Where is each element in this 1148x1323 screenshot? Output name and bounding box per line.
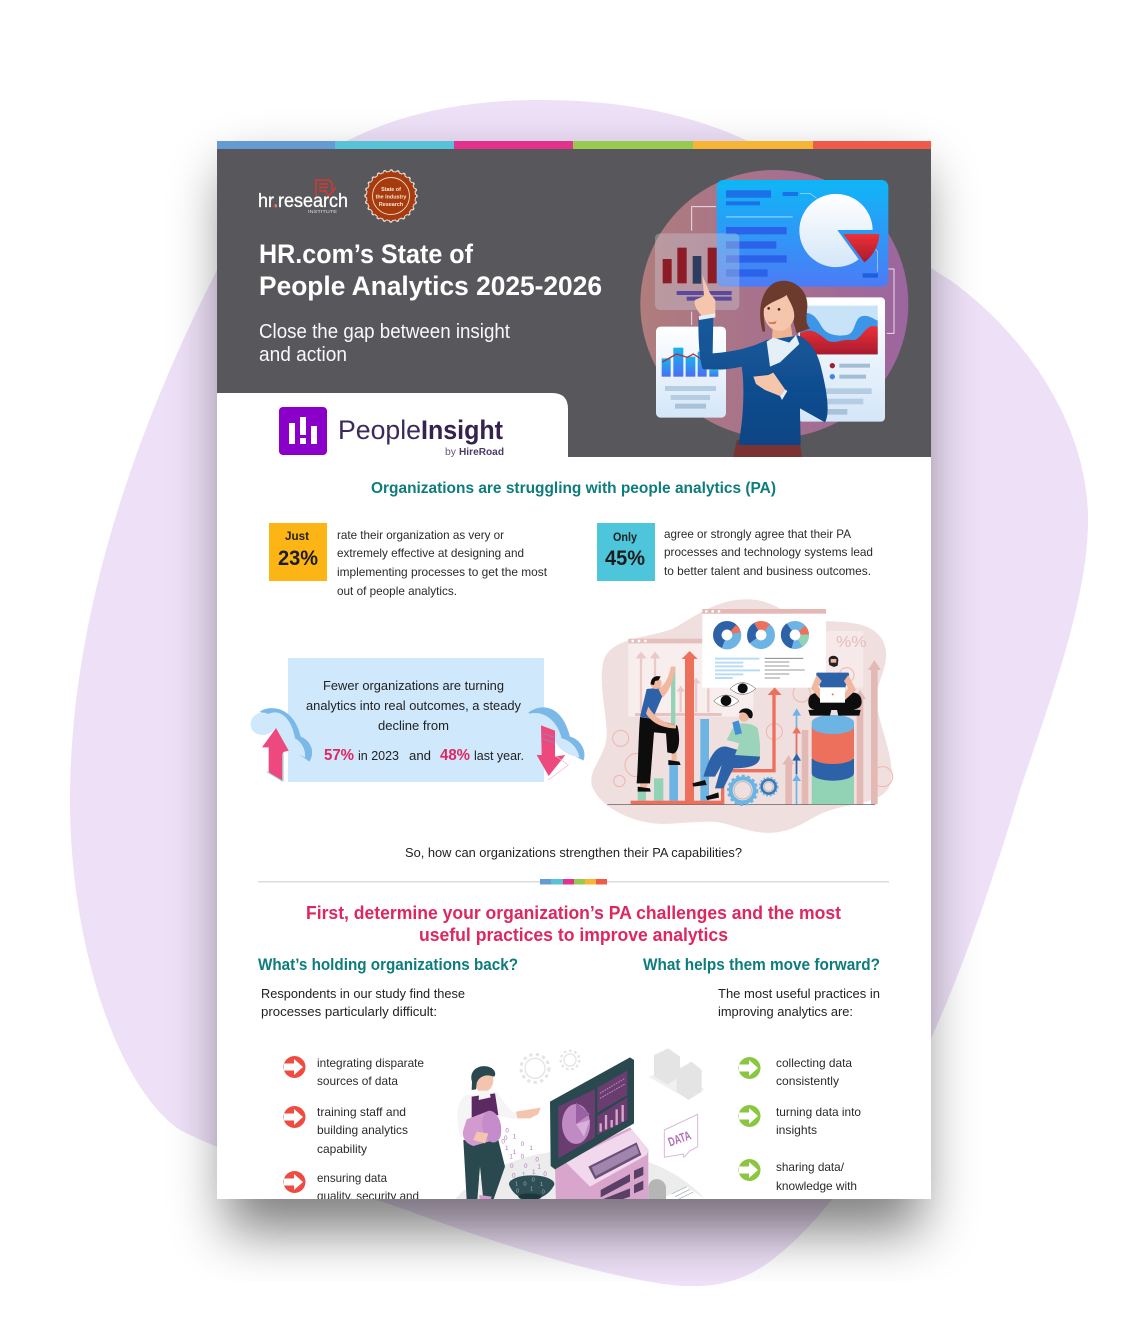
heading: struggling: Organizations are struggling with people analytics (PA) [371,480,776,497]
heading: first determine: First, determine your organization’s PA challenges and the most [306,903,841,923]
intro: useful practices [718,987,880,1019]
badge: State of the Industry Research [366,171,416,221]
icon: cloud with down arrow [528,707,585,780]
challenges list: building analytics [317,1123,408,1137]
challenges list: quality, security and [317,1189,419,1203]
subtitle: Close the gap between insight [259,321,510,343]
challenges list: sources of data [317,1074,398,1088]
intro: useful practices: improving analytics are: [718,1005,853,1019]
falling binary digits: 0 [505,1128,509,1135]
subtitle: and action [259,344,347,366]
intro: useful practices: The most useful practices in [718,987,880,1001]
challenges list: integrating disparate [317,1056,424,1070]
falling binary digits: 1 [532,1169,536,1176]
small rising arrows [792,708,801,804]
pale right panel [826,631,863,688]
practices list: sharing data/ [776,1160,845,1174]
orange arrows [631,651,782,804]
intro: difficult processes [261,987,465,1019]
infographic page [217,141,931,1199]
data speech bubble [664,1114,698,1157]
left chart card [656,327,726,418]
page drop shadow [226,170,922,1231]
intro: difficult processes: processes particularly difficult: [261,1005,437,1019]
subheading: move forward: What helps them move forward? [643,956,880,974]
bowl: 1 [530,1187,533,1193]
closing question: So, how can organizations strengthen their PA capabilities? [405,846,742,860]
icon: green arrow [738,1105,760,1127]
practices list: consistently [776,1074,839,1088]
illustration: data pouring into computer [433,1048,727,1323]
heading: first determine [306,903,841,945]
falling binary digits: 0 [524,1163,528,1170]
back window [628,639,753,717]
callout: declining outcomes: and [409,749,431,763]
header illustration: woman presenting dashboards [640,170,908,457]
falling binary digits: 0 [521,1141,525,1148]
stat: 23% [269,523,327,581]
sponsor tab [217,393,568,457]
falling binary digits: 0 [510,1163,514,1170]
logo: PeopleInsight: HireRoad [459,447,504,458]
data cylinder [812,715,854,804]
subtitle [260,323,510,361]
falling binary digits: 1 [513,1134,517,1141]
callout: declining outcomes: analytics into real outcomes, a steady [306,699,522,713]
decorative rings [613,668,893,787]
stat: 45%: 45% [605,547,645,570]
bowl: 0 [542,1189,545,1195]
falling binary digits: 1 [505,1145,509,1152]
icon: cloud with up arrow [251,708,312,781]
logo: hr.research institute: INSTITUTE [308,209,337,214]
falling binary digits: 0 [521,1154,525,1161]
icon: green arrow [738,1159,760,1181]
logo: hr.research institute [258,180,348,214]
badge: State of the Industry Research: Research [379,202,403,208]
woman figure [695,275,828,457]
stat text: 45% [664,530,872,575]
eyes [714,683,756,707]
icon: red arrow [284,1171,306,1193]
falling binary digits: 0 [535,1157,539,1164]
logo: PeopleInsight [279,407,504,458]
pale arrows [782,660,881,804]
stat text: 23%: extremely effective at designing and [337,546,524,560]
stat text: 23%: out of people analytics. [337,584,457,598]
falling binary digits: 0 [504,1135,508,1142]
callout: declining outcomes: decline from [378,719,449,733]
person [457,1066,541,1200]
bars [638,719,709,801]
title: HR.com’s State of [259,239,474,269]
illustration: team analysing data [591,599,893,833]
falling binary digits [501,1128,547,1179]
stat: 45%: Only [613,530,637,544]
callout: declining outcomes: Fewer organizations are turning [323,679,504,693]
stat: 23%: 23% [278,547,318,570]
falling binary digits: 1 [529,1145,533,1152]
logo: PeopleInsight: Insight [421,415,503,445]
callout: declining outcomes: in 2023 [358,749,399,763]
challenges list: ensuring data [317,1171,387,1185]
subheading: holding back: What’s holding organizations back? [258,956,518,974]
falling binary digits: 1 [509,1154,513,1161]
badge: State of the Industry Research: State of [381,187,401,193]
intro: difficult processes: Respondents in our study find these [261,987,465,1001]
bowl: 0 [516,1189,519,1195]
bowl: 1 [540,1182,543,1188]
computer [550,1057,648,1207]
stat text: 45%: processes and technology systems lead [664,545,873,559]
right chart card [798,297,885,422]
bowl: 1 [515,1181,518,1187]
logo: hr.research institute: hr.research [258,190,348,212]
falling binary digits: 0 [543,1171,547,1178]
icon: red arrow [284,1056,306,1078]
background purple blob [70,100,1088,1286]
practices list: knowledge with [776,1179,857,1193]
ground and base [607,804,875,805]
stat text: 45%: to better talent and business outcomes. [664,564,871,578]
stat: 45% [597,523,655,581]
connectors [692,207,894,333]
percent symbols: %% [836,634,867,651]
man on cylinder with laptop [808,656,862,716]
bowl: 0 [532,1178,535,1184]
falling binary digits: 1 [513,1149,517,1156]
title [259,239,602,301]
practices list: turning data into [776,1105,861,1119]
callout: declining outcomes: last year. [474,749,524,763]
stat text: 23%: rate their organization as very or [337,528,504,542]
falling binary digits: 0 [512,1172,516,1179]
stat text: 23%: implementing processes to get the most [337,565,548,579]
challenges list [284,1056,424,1203]
header colour strip [217,141,931,149]
falling binary digits: 0 [501,1138,505,1145]
grey box and document [648,1179,707,1207]
icon: green arrow [738,1057,760,1079]
bowl: 0 [523,1181,526,1187]
stat: 23%: Just [285,529,309,543]
falling binary digits: 1 [522,1172,526,1179]
stat text: 45%: agree or strongly agree that their PA [664,527,851,541]
badge: State of the Industry Research: the Industry [376,194,406,200]
translucent bar panel [655,233,739,310]
gears [728,776,778,805]
donut chart window [702,609,826,688]
man with ruler [637,667,681,792]
dashboard: blue panel [717,180,888,287]
data speech bubble: DATA [666,1128,693,1149]
logo: PeopleInsight: by [445,447,456,458]
challenges list: training staff and [317,1105,406,1119]
callout: declining outcomes [288,658,544,782]
callout: declining outcomes: 57% [324,747,354,764]
logo: PeopleInsight: People [338,415,421,445]
heading: first determine: useful practices to improve analytics [419,925,728,945]
server racks [648,1048,705,1100]
header background [217,149,931,457]
practices list: collecting data [776,1056,852,1070]
bowl [509,1175,554,1200]
icon: red arrow [284,1106,306,1128]
callout: declining outcomes: 48% [440,747,470,764]
challenges list: capability [317,1142,367,1156]
practices list [738,1056,861,1193]
falling binary digits: 1 [537,1164,541,1171]
seated woman [692,708,760,800]
stat text: 23% [337,528,548,598]
gears outline [521,1051,579,1082]
practices list: insights [776,1123,817,1137]
title: People Analytics 2025-2026 [259,271,602,301]
